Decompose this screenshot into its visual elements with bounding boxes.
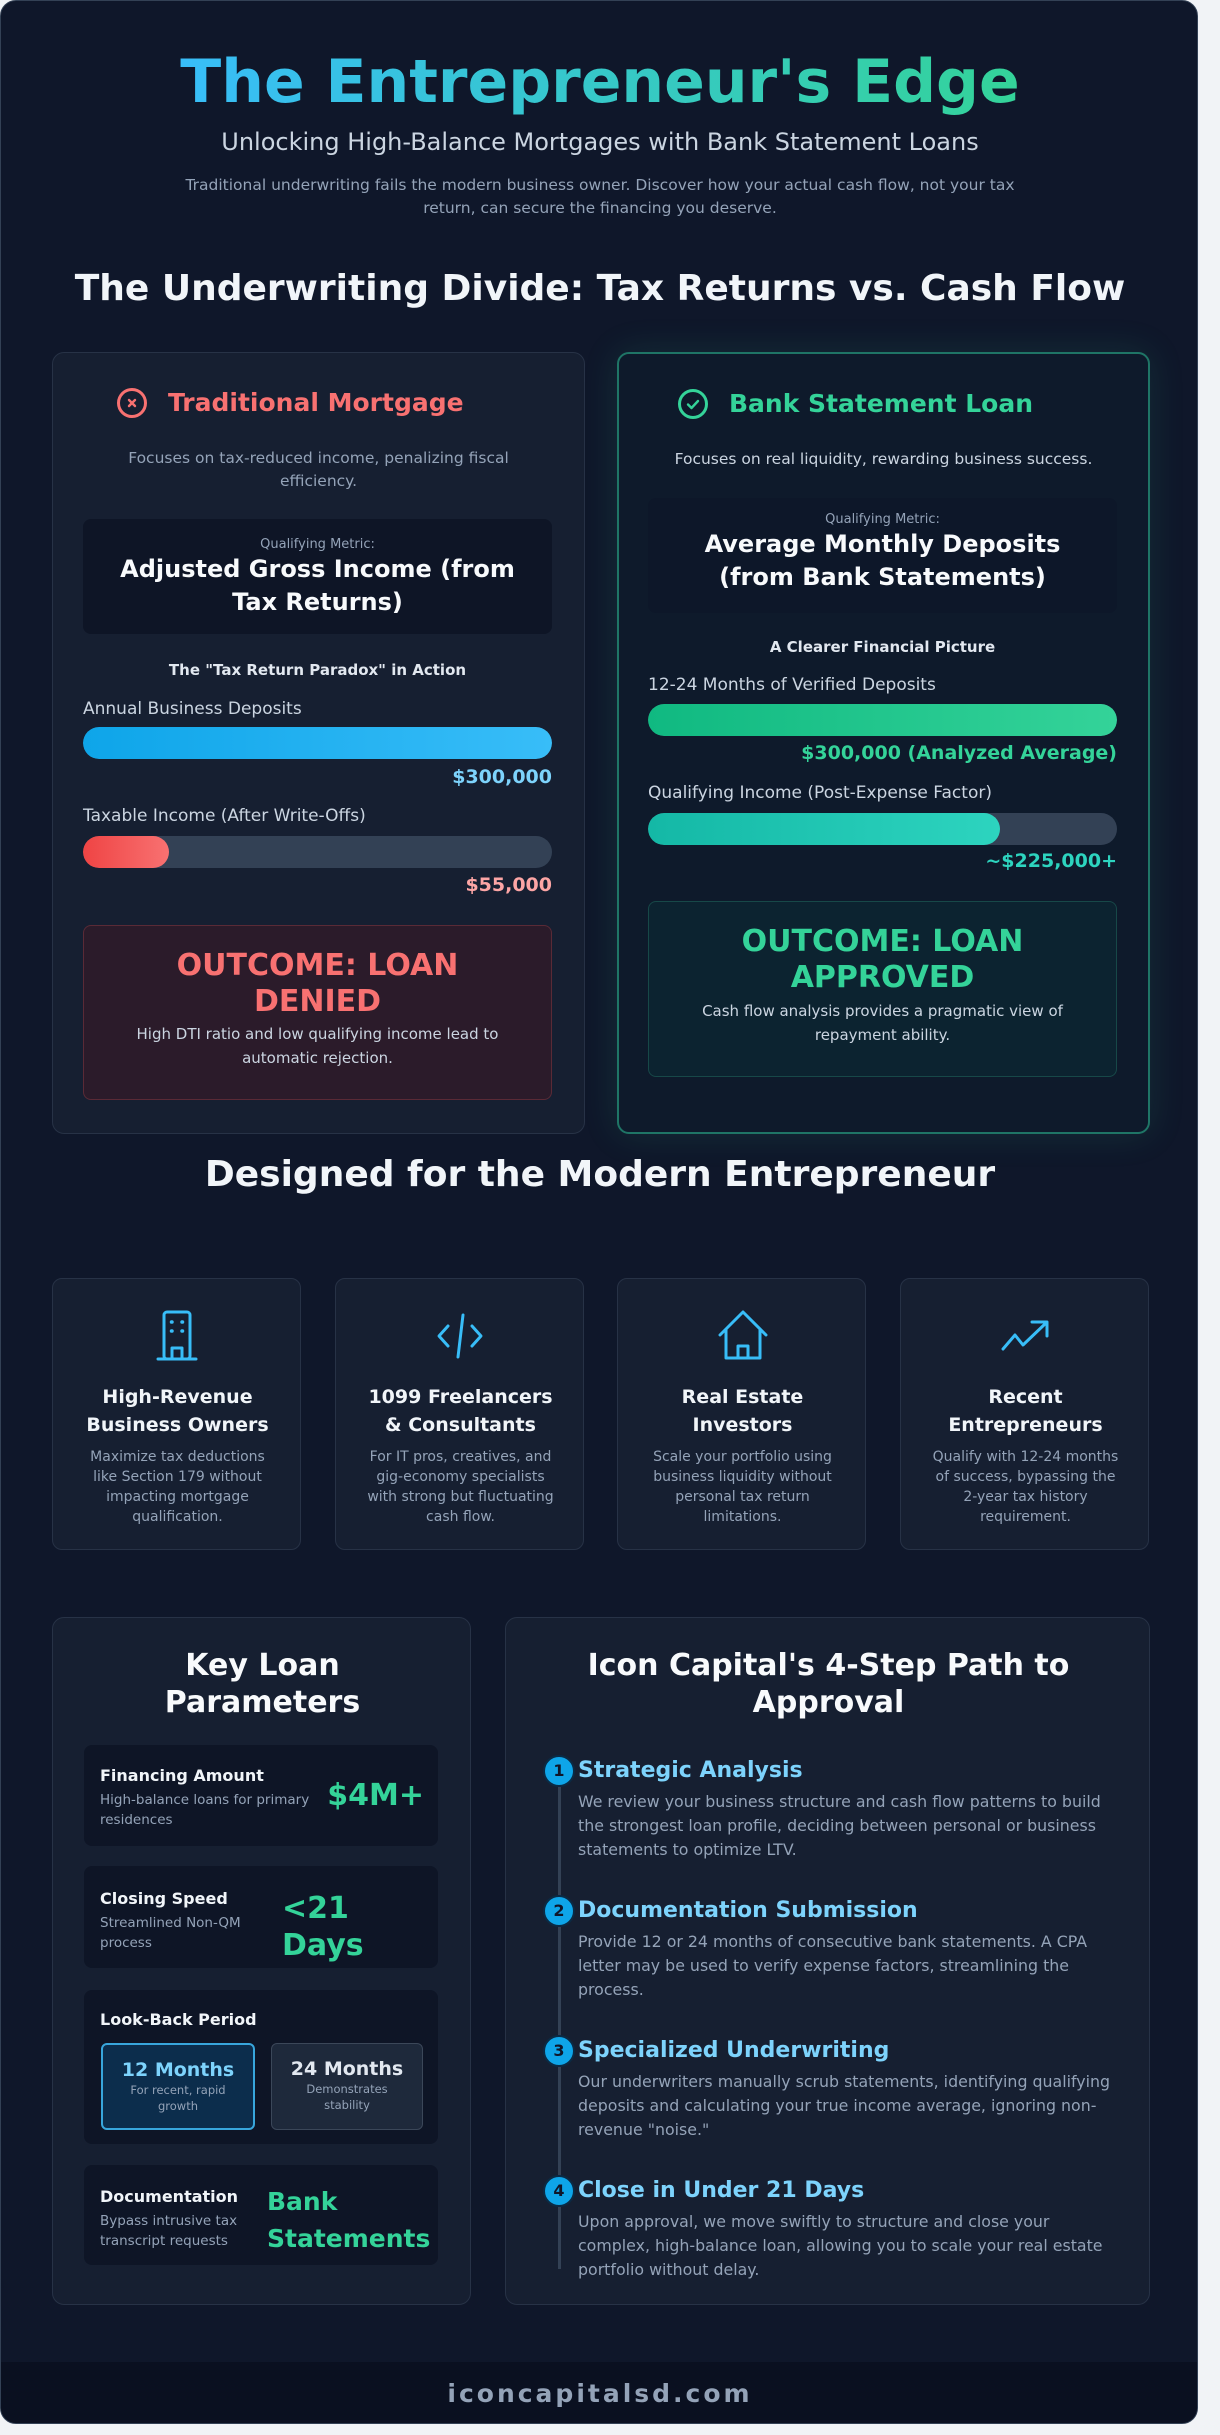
- card: business owners: Maximize tax deductions like Section 179 without impacting mortgage qualification.: [90, 1449, 265, 1525]
- option: 12 months: [101, 2043, 255, 2130]
- metric box traditional: [83, 519, 552, 634]
- step 4: Upon approval, we move swiftly to structure and close your complex, high-balance loan, allowing you to scale your real estate portfolio without delay.: [578, 2212, 1103, 2279]
- outcome: denied: High DTI ratio and low qualifying income lead to automatic rejection.: [137, 1025, 498, 1067]
- param: look-back period: Look-Back Period: [100, 2010, 257, 2029]
- step 1: 1: [553, 1761, 565, 1780]
- option: 24 months: Demonstrates stability: [306, 2082, 388, 2112]
- panel: traditional mortgage: [52, 352, 585, 1134]
- step 4: [543, 2175, 1103, 2279]
- card: freelancers: [335, 1278, 584, 1550]
- option: 24 months: 24 Months: [291, 2058, 403, 2080]
- bar: qualifying income: [648, 783, 1117, 872]
- panel: 4-step path: [505, 1617, 1150, 2305]
- title: The Entrepreneur's Edge: [180, 47, 1020, 117]
- metric box bank: Average Monthly Deposits (from Bank Statements): [705, 530, 1060, 591]
- card: real estate: Scale your portfolio using business liquidity without personal tax return limitations.: [653, 1449, 832, 1525]
- metric box bank: Qualifying Metric:: [825, 512, 940, 527]
- outcome: approved: [648, 901, 1117, 1077]
- card: business owners: [52, 1278, 301, 1550]
- icon: x circle: [117, 388, 147, 418]
- step 2: [543, 1895, 1087, 2036]
- outcome: approved: OUTCOME: LOAN APPROVED: [742, 924, 1023, 995]
- icon: code: [438, 1314, 482, 1358]
- step 3: [543, 2035, 1110, 2176]
- param: closing speed: Closing Speed: [100, 1889, 228, 1908]
- panel: key loan parameters: [52, 1617, 471, 2305]
- key params title: Key Loan Parameters: [165, 1648, 360, 1720]
- step 2: Provide 12 or 24 months of consecutive bank statements. A CPA letter may be used to verify expense factors, streamlining the process.: [578, 1932, 1087, 1999]
- traditional header: Traditional Mortgage: [168, 388, 464, 417]
- param: documentation: Documentation: [100, 2187, 238, 2206]
- card: business owners: High-Revenue Business Owners: [86, 1386, 269, 1436]
- param: closing speed: Streamlined Non-QM process: [100, 1915, 241, 1951]
- bar: taxable income: Taxable Income (After Write-Offs): [83, 806, 366, 826]
- panel: bank statement loan: [617, 352, 1150, 1134]
- bar: annual deposits: Annual Business Deposits: [83, 699, 302, 719]
- card: real estate: Real Estate Investors: [682, 1386, 803, 1436]
- step 4: Close in Under 21 Days: [578, 2178, 864, 2203]
- paradox heading: The "Tax Return Paradox" in Action: [169, 661, 466, 679]
- step 2: Documentation Submission: [578, 1898, 918, 1923]
- bar: qualifying income: ~$225,000+: [985, 850, 1117, 872]
- step 1: Strategic Analysis: [578, 1758, 803, 1783]
- param: documentation: [84, 2165, 438, 2265]
- option: 12 months: 12 Months: [122, 2059, 234, 2081]
- param: financing amount: [84, 1745, 438, 1846]
- param: closing speed: <21 Days: [282, 1891, 364, 1963]
- card: recent entrepreneurs: Recent Entrepreneurs: [948, 1386, 1103, 1436]
- param: financing amount: Financing Amount: [100, 1766, 264, 1785]
- step 2: 2: [553, 1901, 565, 1920]
- card: freelancers: For IT pros, creatives, and gig-economy specialists with strong but fluctuating cash flow.: [367, 1449, 554, 1525]
- outcome: denied: [83, 925, 552, 1100]
- param: financing amount: $4M+: [327, 1778, 424, 1813]
- heading: underwriting divide: The Underwriting Divide: Tax Returns vs. Cash Flow: [75, 268, 1125, 309]
- param: look-back period: [84, 1990, 438, 2144]
- bar: taxable income: $55,000: [465, 874, 552, 896]
- step 3: 3: [553, 2041, 565, 2060]
- bar: annual deposits: $300,000: [452, 766, 552, 788]
- option: 24 months: [271, 2043, 423, 2130]
- heading: clearer picture: A Clearer Financial Picture: [770, 638, 995, 656]
- footer: iconcapitalsd.com: [447, 2379, 753, 2408]
- bank desc: Focuses on real liquidity, rewarding business success.: [675, 450, 1092, 468]
- card: recent entrepreneurs: [900, 1278, 1149, 1550]
- step 1: [543, 1755, 1101, 1896]
- param: closing speed: [84, 1866, 438, 1968]
- icon: building: [156, 1310, 198, 1360]
- bar: annual deposits: [83, 699, 552, 788]
- icon: check circle: [678, 389, 708, 419]
- icon: house: [718, 1310, 768, 1360]
- card: freelancers: 1099 Freelancers & Consultants: [368, 1386, 553, 1436]
- card: recent entrepreneurs: Qualify with 12-24 months of success, bypassing the 2-year tax history requirement.: [933, 1449, 1118, 1525]
- bar: verified deposits: [648, 675, 1117, 764]
- metric box bank: [648, 498, 1117, 613]
- outcome: approved: Cash flow analysis provides a pragmatic view of repayment ability.: [702, 1002, 1063, 1044]
- bar: qualifying income: Qualifying Income (Post-Expense Factor): [648, 783, 992, 803]
- param: documentation: Bypass intrusive tax transcript requests: [100, 2213, 237, 2249]
- bank header: Bank Statement Loan: [729, 389, 1033, 418]
- metric box traditional: Qualifying Metric:: [260, 537, 375, 552]
- bar: verified deposits: $300,000 (Analyzed Average): [801, 742, 1117, 764]
- subtitle: Unlocking High-Balance Mortgages with Bank Statement Loans: [221, 128, 979, 156]
- bar: verified deposits: 12-24 Months of Verified Deposits: [648, 675, 936, 695]
- step 4: 4: [553, 2181, 565, 2200]
- heading: modern entrepreneur: Designed for the Modern Entrepreneur: [205, 1154, 995, 1195]
- card: real estate: [617, 1278, 866, 1550]
- step 3: Specialized Underwriting: [578, 2038, 889, 2063]
- bar: taxable income: [82, 806, 552, 896]
- param: documentation: Bank Statements: [267, 2187, 430, 2253]
- traditional desc: Focuses on tax-reduced income, penalizing fiscal efficiency.: [128, 449, 509, 490]
- option: 12 months: For recent, rapid growth: [130, 2083, 226, 2113]
- step 1: We review your business structure and cash flow patterns to build the strongest loan profile, deciding between personal or business statements to optimize LTV.: [578, 1792, 1101, 1859]
- step 3: Our underwriters manually scrub statements, identifying qualifying deposits and calculating your true income average, ignoring non-revenue "noise.": [578, 2072, 1110, 2139]
- steps title: Icon Capital's 4-Step Path to Approval: [588, 1648, 1069, 1720]
- outcome: denied: OUTCOME: LOAN DENIED: [177, 948, 458, 1019]
- footer: [1, 2362, 1199, 2425]
- param: financing amount: High-balance loans for primary residences: [100, 1792, 309, 1828]
- intro text: Traditional underwriting fails the modern business owner. Discover how your actual cash flow, not your tax return, can secure the financing you deserve.: [185, 176, 1015, 217]
- icon: trending up: [1001, 1320, 1048, 1351]
- metric box traditional: Adjusted Gross Income (from Tax Returns): [120, 555, 515, 616]
